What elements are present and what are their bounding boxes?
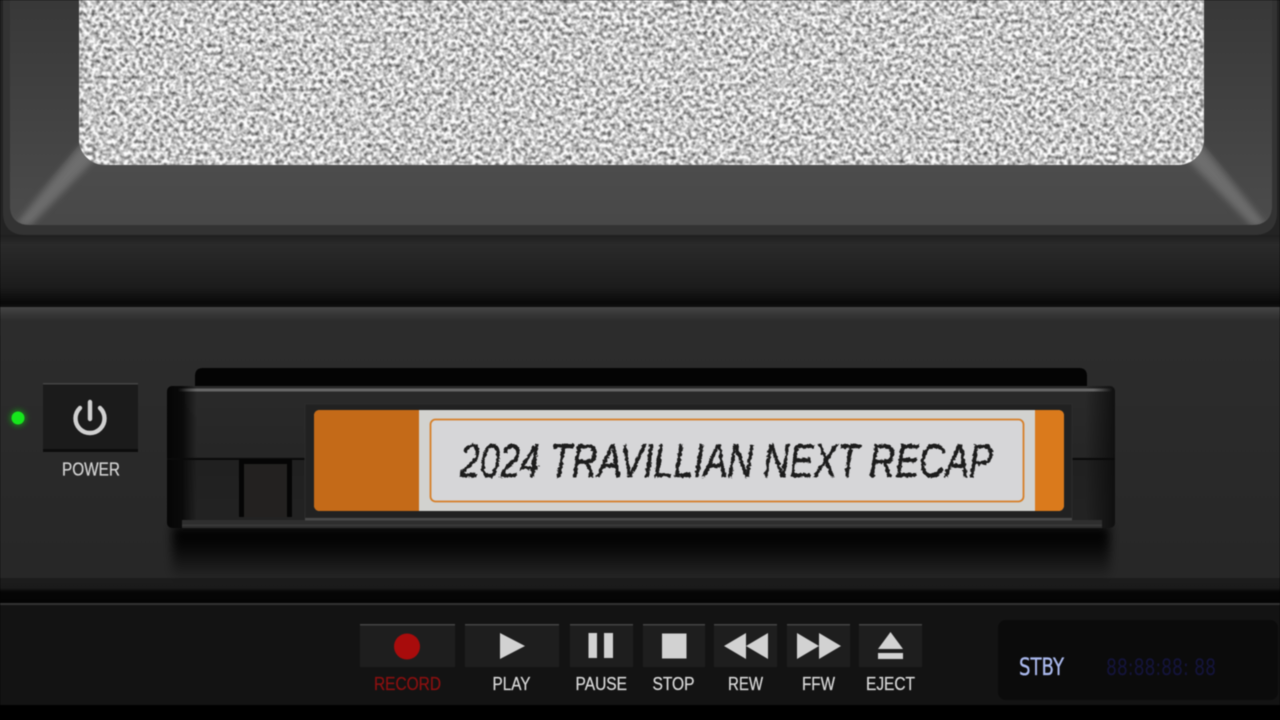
button: fast forward: FFW — [802, 674, 835, 694]
button: record: RECORD — [374, 674, 441, 694]
button: pause — [570, 624, 633, 694]
panel: transport control bar — [0, 603, 1280, 705]
panel: VHS cassette — [167, 368, 1115, 528]
button: play: PLAY — [492, 674, 530, 694]
button: eject — [859, 624, 922, 694]
cassette body — [167, 386, 1115, 528]
cassette label — [314, 410, 1064, 511]
panel: standby display — [998, 620, 1278, 700]
label title: 2024 TRAVILLIAN NEXT RECAP — [459, 434, 993, 487]
button: eject: EJECT — [866, 674, 915, 694]
button: rewind — [714, 624, 777, 694]
write-protect notch — [242, 462, 290, 517]
button: rewind: REW — [728, 674, 763, 694]
label title box — [430, 420, 1024, 502]
button: stop — [643, 624, 705, 694]
power button — [43, 383, 138, 452]
status text: STBY — [1019, 653, 1064, 681]
cassette shadow — [172, 526, 1110, 580]
button: play — [465, 624, 559, 694]
icon: power symbol — [76, 402, 105, 433]
panel: TV static screen — [79, 0, 1204, 165]
panel: upper shelf band — [0, 235, 1280, 304]
inactive time readout: 88:88:88: 88 — [1106, 656, 1216, 681]
label: power: POWER — [62, 460, 120, 480]
cassette top — [195, 368, 1087, 388]
button: record — [360, 624, 455, 694]
icon: power LED — [9, 409, 27, 427]
button: fast forward — [787, 624, 850, 694]
panel: television bezel — [0, 0, 1280, 245]
label recess — [305, 404, 1072, 518]
button: pause: PAUSE — [576, 674, 627, 694]
button: stop: STOP — [652, 674, 694, 694]
panel: VCR front — [0, 304, 1280, 603]
